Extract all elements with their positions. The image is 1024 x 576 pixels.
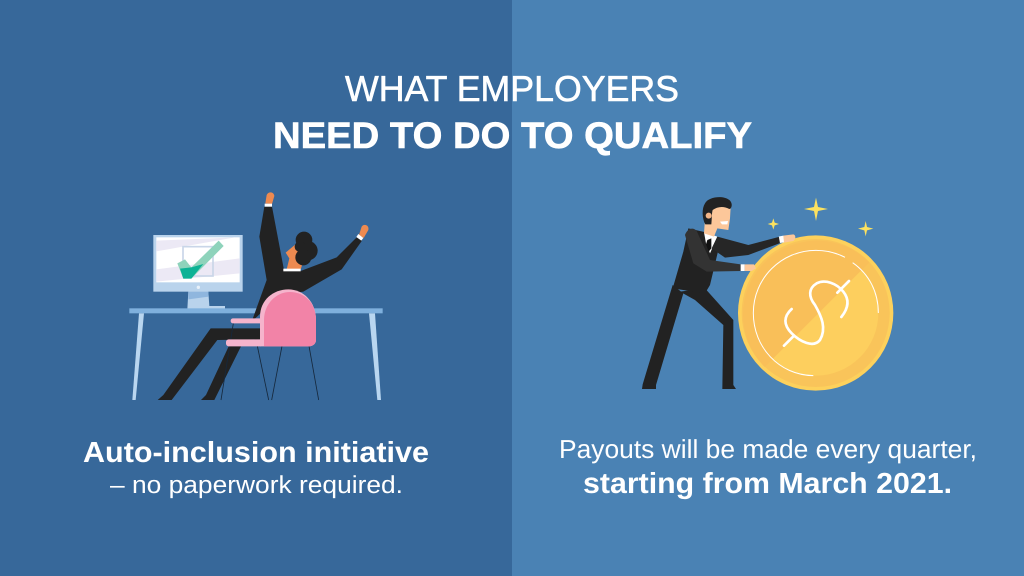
text block: right caption: starting from March 2021.	[583, 468, 952, 500]
panel: left background	[0, 0, 512, 576]
text block: left caption: – no paperwork required.	[110, 472, 403, 499]
pink office chair	[221, 289, 319, 400]
text block: right caption: Payouts will be made every quarter,	[559, 434, 977, 464]
text block: left caption: Auto-inclusion initiative	[83, 437, 429, 469]
person in black suit pushing	[642, 197, 795, 389]
sparkles	[768, 198, 873, 236]
panel: right background	[512, 0, 1024, 576]
title: WHAT EMPLOYERS	[345, 68, 679, 109]
illustration: man pushing a gold coin	[642, 197, 893, 391]
title: NEED TO DO TO QUALIFY	[273, 115, 752, 156]
illustration: man celebrating at desk	[129, 192, 383, 400]
gold coin with dollar sign	[738, 235, 893, 391]
person in black suit with raised arms	[158, 192, 368, 400]
icon: computer monitor	[153, 235, 243, 309]
title	[273, 68, 752, 156]
text block: right caption	[559, 434, 977, 500]
desk	[129, 308, 383, 400]
text block: left caption	[83, 437, 429, 499]
